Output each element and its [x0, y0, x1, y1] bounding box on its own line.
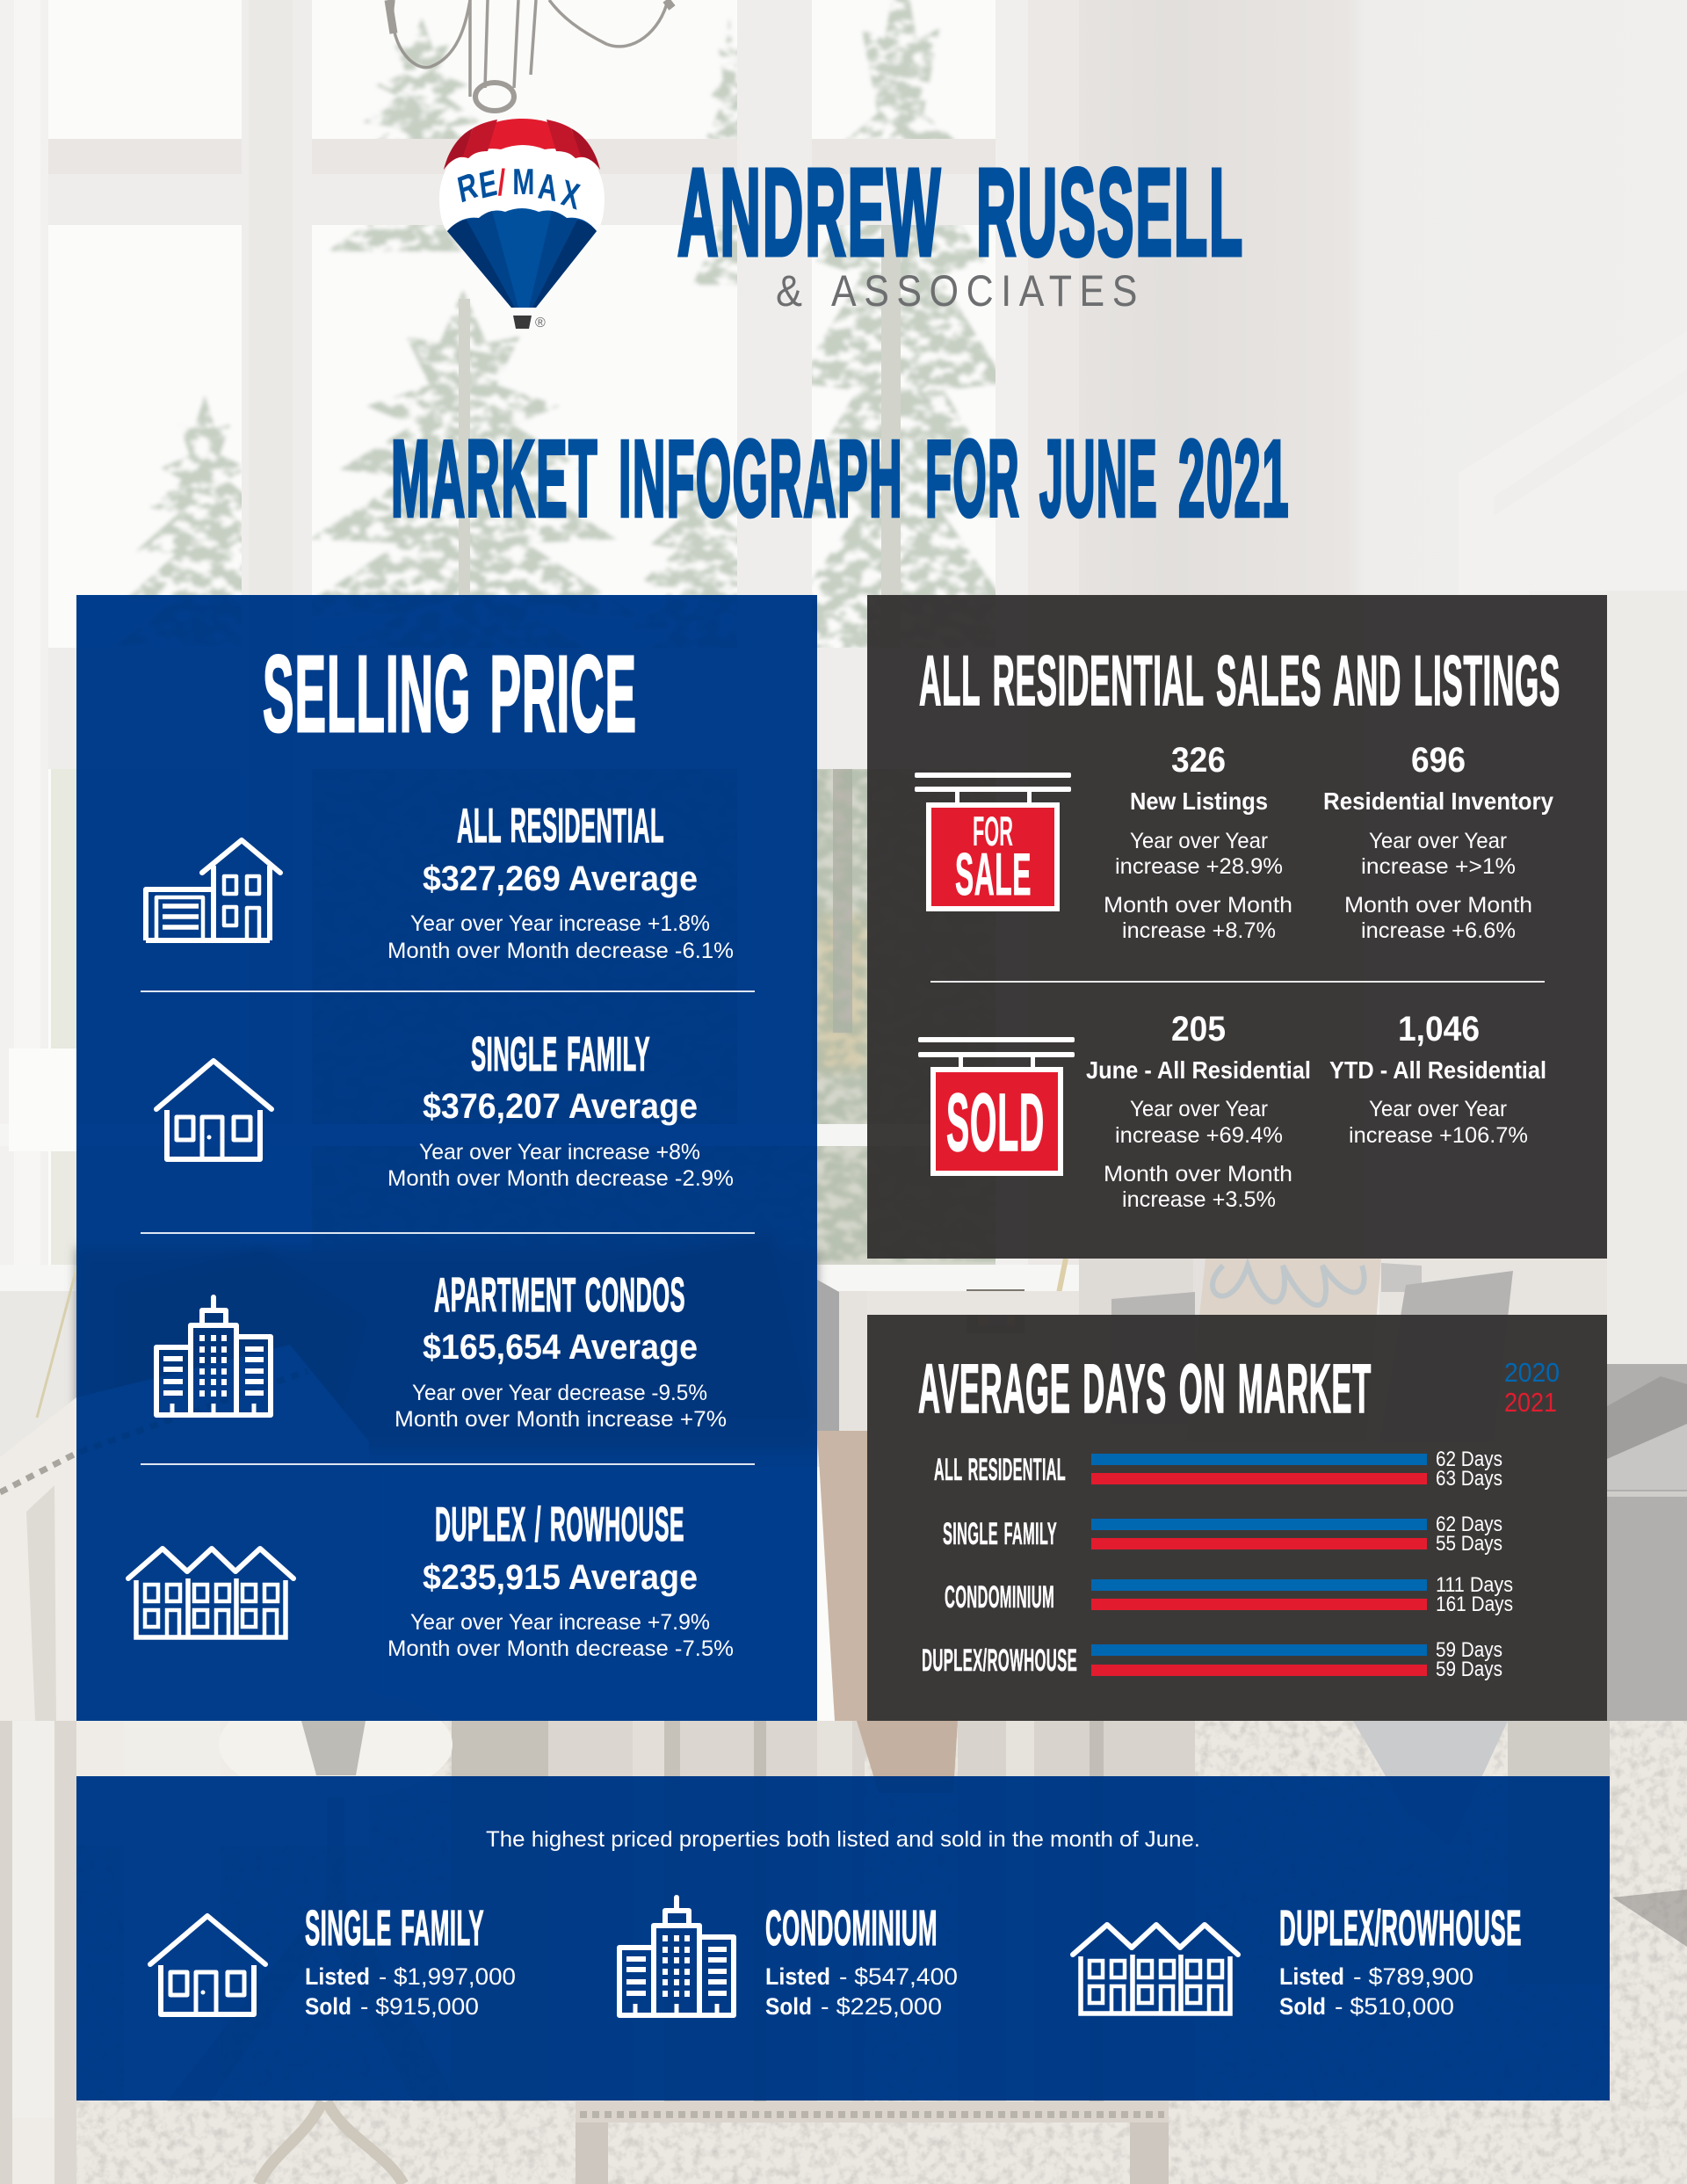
stats: june all residential: increase +69.4%	[1115, 1123, 1283, 1148]
listing: condominium: Sold	[765, 1993, 812, 2020]
icon: for sale sign: SALE	[955, 841, 1032, 908]
listing: single family: Listed	[305, 1963, 370, 1990]
carpet floor	[0, 1721, 1687, 2184]
logo: RE/MAX balloon: ®	[535, 316, 546, 330]
logo: RE/MAX balloon	[439, 119, 605, 330]
listing: single family: - $1,997,000	[379, 1963, 516, 1990]
stats: residential inventory: increase +>1%	[1361, 854, 1516, 879]
row: duplex rowhouse: Year over Year increase +7.9%	[410, 1610, 710, 1635]
bar group: all residential: 63 Days	[1436, 1467, 1502, 1491]
stats: residential inventory: 696	[1411, 741, 1466, 780]
bar group: duplex rowhouse	[922, 1638, 1502, 1681]
legend: 2021	[1504, 1387, 1557, 1418]
row: single family: SINGLE FAMILY	[471, 1027, 650, 1081]
icon: rowhouse	[1073, 1925, 1238, 2014]
panel: average days on market	[867, 1315, 1607, 1721]
panel: highest priced properties	[76, 1776, 1610, 2101]
stats: residential inventory	[1323, 741, 1553, 943]
infographic canvas: 2021	[1178, 419, 1290, 540]
stats: new listings: increase +8.7%	[1122, 918, 1276, 943]
listing: condominium: Listed	[765, 1963, 830, 1990]
bar group: single family: 55 Days	[1436, 1532, 1502, 1556]
stats: new listings: New Listings	[1130, 787, 1268, 815]
stats: residential inventory: Year over Year	[1369, 829, 1507, 853]
listing: duplex rowhouse: Listed	[1279, 1963, 1344, 1990]
infographic canvas: RUSSELL	[976, 142, 1244, 281]
row: duplex rowhouse: $235,915 Average	[423, 1558, 698, 1597]
stats: june all residential: June - All Residential	[1086, 1056, 1311, 1084]
stats: ytd all residential: 1,046	[1398, 1010, 1480, 1048]
row: single family: Year over Year increase +8%	[419, 1140, 700, 1165]
listing: condominium	[619, 1897, 958, 2020]
logo: RE/MAX balloon: RE/MAX	[454, 161, 583, 218]
gap stripes: stool and blanket behind lower panel	[124, 1690, 1610, 2184]
row: apartment condos: $165,654 Average	[423, 1328, 698, 1367]
title: FOR	[925, 419, 1020, 540]
row: apartment condos: Year over Year decrease -9.5%	[412, 1381, 707, 1405]
bar group: all residential: 62 Days	[1436, 1448, 1502, 1471]
title: MARKET	[391, 419, 598, 540]
row: duplex rowhouse: DUPLEX / ROWHOUSE	[435, 1497, 684, 1551]
intro text: The highest priced properties both listed and sold in the month of June.	[486, 1827, 1200, 1852]
listing: single family	[150, 1900, 516, 2020]
stats: june all residential: Year over Year	[1130, 1097, 1268, 1121]
forest behind lower windows	[51, 769, 1028, 1266]
row: all residential: Year over Year increase +1.8%	[410, 911, 710, 936]
bar group: condominium: CONDOMINIUM	[945, 1580, 1054, 1614]
brand name: ANDREW	[677, 142, 942, 281]
stats: ytd all residential	[1329, 1010, 1546, 1148]
legend	[1504, 1357, 1560, 1418]
bar group: condominium	[945, 1573, 1513, 1616]
stats: residential inventory: Month over Month	[1344, 893, 1532, 918]
listing: condominium: CONDOMINIUM	[765, 1900, 938, 1956]
icon: for sale sign: FOR	[973, 808, 1013, 854]
panel: selling price	[76, 595, 817, 1721]
brand name: ASSOCIATES	[831, 266, 1145, 316]
listing: single family: SINGLE FAMILY	[305, 1900, 484, 1956]
bar group: duplex rowhouse: DUPLEX/ROWHOUSE	[922, 1643, 1077, 1678]
bar group: all residential: ALL RESIDENTIAL	[934, 1453, 1066, 1487]
row: single family: $376,207 Average	[423, 1087, 698, 1126]
listing: duplex rowhouse: Sold	[1279, 1993, 1326, 2020]
icon: sold sign: SOLD	[946, 1077, 1045, 1168]
stats: residential inventory: increase +6.6%	[1361, 918, 1516, 943]
row: duplex rowhouse: Month over Month decrease -7.5%	[387, 1636, 734, 1661]
row: all residential	[146, 798, 734, 963]
bar group: single family: 62 Days	[1436, 1513, 1502, 1536]
stats: june all residential: increase +3.5%	[1122, 1187, 1276, 1212]
row: apartment condos: APARTMENT CONDOS	[434, 1267, 685, 1322]
stats: june all residential	[1086, 1010, 1311, 1212]
stats: ytd all residential: increase +106.7%	[1349, 1123, 1528, 1148]
stats: new listings: 326	[1171, 741, 1226, 780]
listing: duplex rowhouse	[1073, 1900, 1522, 2020]
row: single family: Month over Month decrease -2.9%	[387, 1166, 734, 1191]
stats: june all residential: 205	[1171, 1010, 1226, 1048]
panel: selling price: SELLING PRICE	[263, 635, 637, 755]
stats: new listings	[1104, 741, 1292, 943]
listing: single family: Sold	[305, 1993, 351, 2020]
icon: for sale sign	[915, 773, 1071, 909]
stats: new listings: increase +28.9%	[1115, 854, 1283, 879]
stats: residential inventory: Residential Inventory	[1323, 787, 1553, 815]
title: JUNE	[1039, 419, 1158, 540]
panel: all residential sales and listings	[867, 595, 1607, 1259]
title: INFOGRAPH	[619, 419, 903, 540]
stats: june all residential: Month over Month	[1104, 1162, 1292, 1186]
icon: apartment building	[619, 1897, 734, 2015]
bar group: condominium: 161 Days	[1436, 1593, 1513, 1616]
stats: new listings: Month over Month	[1104, 893, 1292, 918]
row: all residential: ALL RESIDENTIAL	[457, 798, 664, 853]
listing: duplex rowhouse: - $789,900	[1353, 1963, 1473, 1990]
listing: condominium: - $547,400	[839, 1963, 958, 1990]
row: all residential: Month over Month decrease -6.1%	[387, 939, 734, 963]
pale trees in upper windows	[115, 0, 1038, 1261]
bar chart	[922, 1448, 1513, 1681]
icon: house with garage	[146, 840, 280, 940]
stats: new listings: Year over Year	[1130, 829, 1268, 853]
bar group: duplex rowhouse: 59 Days	[1436, 1638, 1502, 1662]
window frames	[0, 0, 1079, 1467]
listing: single family: - $915,000	[360, 1993, 479, 2020]
row: apartment condos: Month over Month increase +7%	[395, 1407, 727, 1432]
chandelier	[388, 0, 672, 111]
row: single family	[156, 1027, 734, 1191]
row: apartment condos	[156, 1267, 727, 1432]
legend: 2020	[1504, 1357, 1560, 1388]
bar group: duplex rowhouse: 59 Days	[1436, 1658, 1502, 1681]
icon: rowhouse	[128, 1549, 293, 1638]
row: all residential: $327,269 Average	[423, 860, 698, 898]
row: duplex rowhouse	[128, 1497, 734, 1661]
icon: sold sign	[918, 1037, 1075, 1173]
bar group: condominium: 111 Days	[1436, 1573, 1513, 1597]
brand name: &	[776, 266, 802, 316]
stats: ytd all residential: YTD - All Residential	[1329, 1056, 1546, 1084]
listing: duplex rowhouse: - $510,000	[1335, 1993, 1454, 2020]
icon: apartment building	[156, 1297, 271, 1415]
armchair at left	[0, 769, 369, 2184]
bar group: single family: SINGLE FAMILY	[943, 1517, 1057, 1551]
bar group: all residential	[934, 1448, 1502, 1491]
wall moulding	[1459, 331, 1687, 1371]
icon: single house	[156, 1061, 272, 1159]
stats: ytd all residential: Year over Year	[1369, 1097, 1507, 1121]
sofa and pillows behind panels	[76, 1230, 1687, 1897]
listing: condominium: - $225,000	[821, 1993, 942, 2020]
icon: single house	[150, 1916, 265, 2014]
bar group: single family	[943, 1513, 1502, 1556]
